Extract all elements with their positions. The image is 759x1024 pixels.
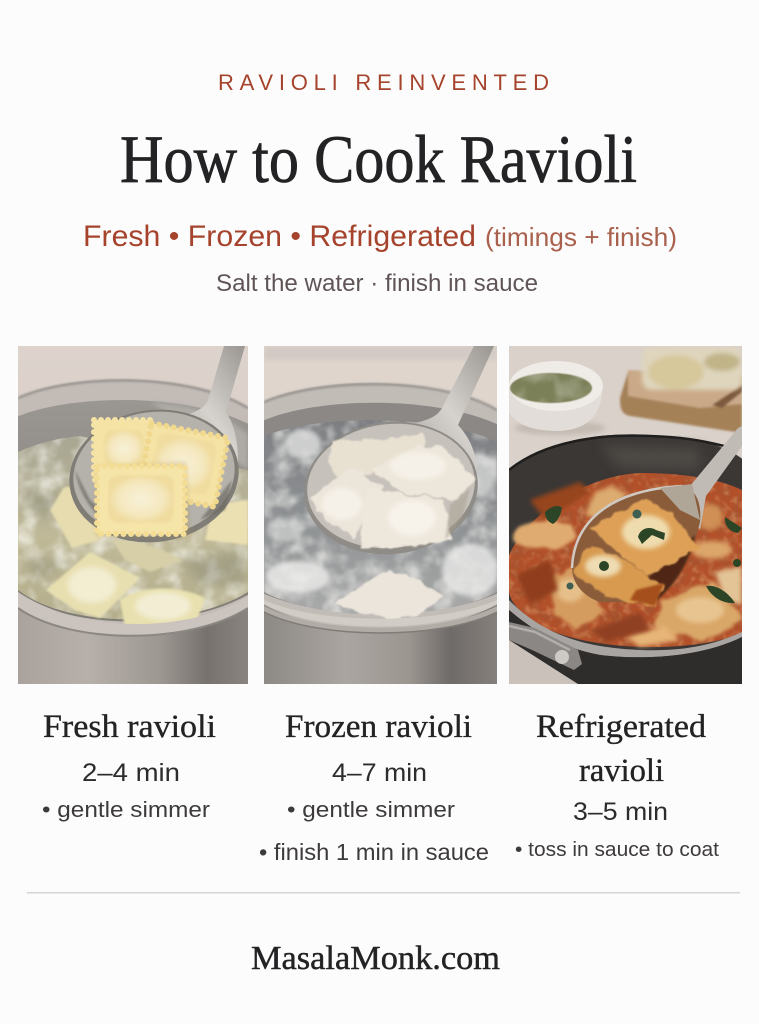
ravioli in ladle (94, 420, 228, 536)
column: refrigerated ravioli (515, 709, 719, 861)
header (83, 70, 677, 297)
water (264, 420, 497, 614)
ravioli in ladle (310, 432, 474, 548)
heading: frozen ravioli: Frozen ravioli (285, 709, 472, 745)
panel: refrigerated ravioli photo (505, 346, 746, 684)
pot inner wall (10, 400, 256, 622)
ladle bowl (304, 422, 478, 554)
note: finish in sauce: • finish 1 min in sauce (259, 839, 489, 865)
pan wall and body (509, 434, 742, 658)
pan handle (509, 622, 582, 670)
basil leaves (545, 506, 742, 603)
subtitle note: timings and finish: (timings + finish) (485, 222, 677, 252)
note: toss in sauce: • toss in sauce to coat (515, 839, 719, 861)
pot rim (256, 383, 505, 630)
column: fresh ravioli (42, 709, 216, 822)
pot body (264, 604, 497, 684)
timing: 3–5 min: 3–5 min (573, 798, 668, 826)
ravioli on spoon (572, 498, 700, 607)
panel: frozen ravioli photo (256, 346, 505, 684)
front rim (264, 600, 497, 626)
pot body (18, 609, 248, 684)
footer: site name: MasalaMonk.com (251, 940, 500, 977)
subtitle: ravioli types: Fresh • Frozen • Refrigerated (83, 220, 476, 253)
ravioli in water (336, 570, 443, 620)
water (18, 436, 248, 620)
pan lower body (509, 610, 742, 684)
tagline: Salt the water · finish in sauce (216, 270, 538, 297)
sauce (509, 473, 746, 647)
ravioli in sauce (512, 482, 742, 647)
eyebrow: Ravioli Reinvented: RAVIOLI REINVENTED (218, 70, 549, 95)
ladle bowl (69, 410, 239, 542)
icon: herb bowl (509, 361, 606, 435)
pot inner wall (256, 403, 505, 614)
panel: fresh ravioli photo (10, 346, 256, 684)
ravioli in water (46, 486, 248, 628)
foam patches (266, 429, 498, 596)
pan front rim (509, 600, 742, 657)
column: frozen ravioli (259, 709, 489, 865)
heading: refrigerated ravioli: ravioli (579, 753, 664, 789)
ladle handle (414, 346, 494, 466)
icon: glass bottle (642, 347, 742, 390)
cloth (509, 640, 578, 684)
spoon (572, 426, 742, 602)
note: gentle simmer: • gentle simmer (42, 797, 210, 822)
pot rim (18, 380, 248, 624)
sauce texture (509, 473, 746, 647)
heading: fresh ravioli: Fresh ravioli (43, 709, 216, 745)
icon: wooden board (620, 370, 742, 433)
heading: refrigerated ravioli: Refrigerated (536, 709, 707, 745)
heading: refrigerated ravioli (536, 709, 707, 789)
timing: 4–7 min: 4–7 min (332, 759, 427, 787)
front rim highlight (18, 592, 248, 636)
title: How to Cook Ravioli (120, 121, 637, 197)
timing: 2–4 min: 2–4 min (82, 759, 180, 787)
note: gentle simmer: • gentle simmer (287, 797, 455, 822)
ladle handle (190, 346, 245, 462)
